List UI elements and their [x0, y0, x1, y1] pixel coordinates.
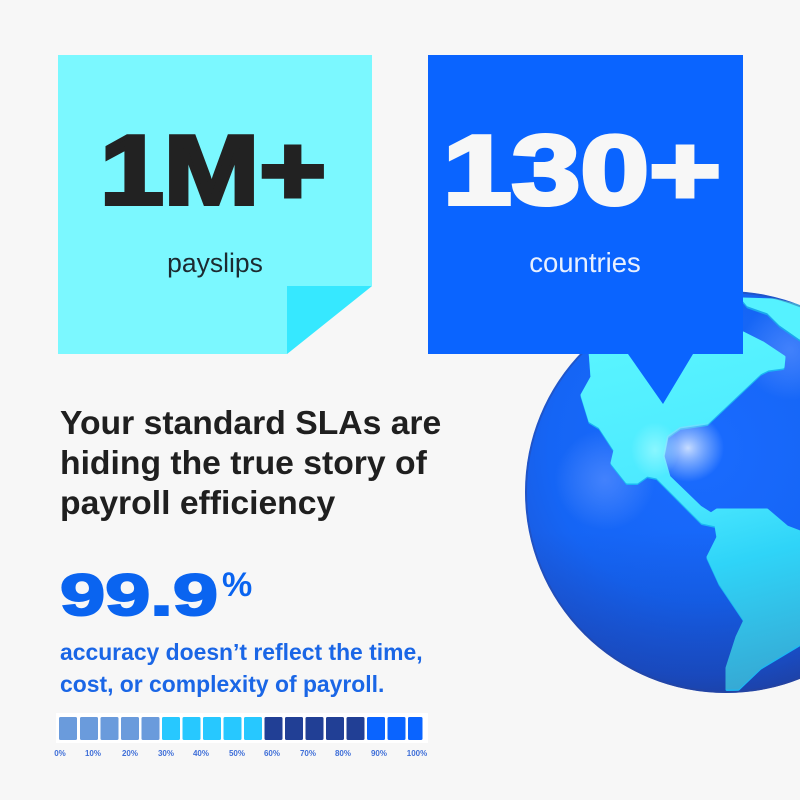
segments: navy [264, 717, 364, 740]
bubble body [428, 55, 743, 404]
segments: cyan [162, 717, 262, 740]
axis labels: 0% [54, 749, 66, 758]
axis labels: 60% [264, 749, 280, 758]
illustration: globe [525, 291, 800, 693]
label: countries: countries [529, 247, 641, 278]
text block: accuracy note: cost, or complexity of payroll. [60, 671, 384, 697]
stat: 99.9%: 99.9 [60, 562, 218, 627]
axis labels [54, 749, 427, 758]
segments: blue [367, 717, 422, 740]
axis labels: 10% [85, 749, 101, 758]
note body [58, 55, 372, 354]
axis labels: 70% [300, 749, 316, 758]
axis labels: 40% [193, 749, 209, 758]
stat: 99.9%: % [222, 566, 252, 604]
folded corner [287, 286, 372, 354]
panel: countries speech bubble [428, 55, 743, 404]
axis labels: 30% [158, 749, 174, 758]
axis labels: 100% [407, 749, 427, 758]
panel: payslips sticky note [58, 55, 372, 354]
axis labels: 80% [335, 749, 351, 758]
label: payslips: payslips [167, 248, 263, 278]
heading: hiding the true story of [60, 444, 428, 482]
axis labels: 50% [229, 749, 245, 758]
text block: accuracy note: accuracy doesn’t reflect the time, [60, 639, 423, 665]
stat: 130+: 130+ [443, 115, 721, 225]
segments: light blue [59, 717, 160, 740]
axis labels: 20% [122, 749, 138, 758]
heading: Your standard SLAs are [60, 404, 441, 442]
axis labels: 90% [371, 749, 387, 758]
heading: payroll efficiency [60, 484, 335, 522]
stat: 1M+: 1M+ [100, 115, 326, 225]
chart: progress scale [54, 713, 428, 758]
